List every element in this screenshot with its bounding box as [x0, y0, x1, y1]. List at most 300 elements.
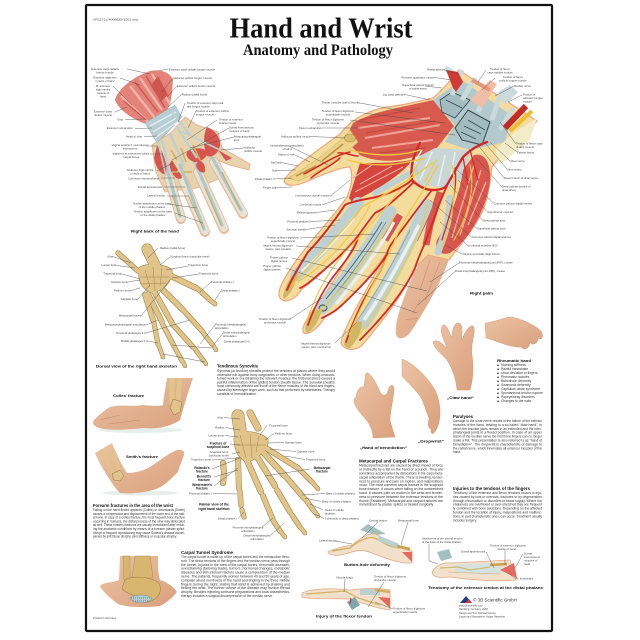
labels: palmar skeleton: articulation	[250, 537, 264, 541]
text block: injuries to the tendons: includes surgery.	[453, 518, 477, 522]
text block: injuries to the tendons: phalanxes are overflexed or over-stretched they are frequent	[453, 503, 542, 507]
wrist tendons and retinaculum	[433, 80, 512, 150]
labels: palmar skeleton: Tuberosity of distal phalanx	[325, 516, 360, 520]
logo: 3B Scientific	[460, 596, 517, 603]
labels: right palm: Tendon of flexor	[490, 67, 510, 71]
caption: dorsal skeleton: Dorsal view of the right hand skeleton	[96, 364, 177, 368]
interosseous muscles	[154, 127, 220, 179]
text block: forearm fractures: Forearm fractures in the area of the wrist	[93, 503, 174, 508]
illustration: hand of benediction	[354, 373, 395, 438]
labels: dorsal skeleton: Proximal phalanx I	[211, 280, 234, 284]
labels: tenotomy: M. lumbricalis	[516, 576, 534, 580]
text block: metacarpal and carpal fractures: or indirectly by a fall on the hand or a punch. They are	[359, 468, 443, 472]
illustration: claw hand	[433, 323, 474, 390]
labels: right palm: Lig. carpi palmare	[383, 92, 405, 96]
adductor muscle	[349, 160, 412, 202]
title: Hand and Wrist	[230, 12, 413, 44]
labels: back of the hand: Extensor digitorum	[93, 76, 117, 80]
labels: palmar skeleton: Base of middle phalanx	[326, 492, 356, 496]
labels: right palm: pollicis longus muscle	[499, 78, 527, 82]
labels: back of the hand: Tendon of extensor carpi radi-	[187, 101, 224, 105]
credits: www.3bscientific.com	[459, 604, 483, 608]
labels: palmar skeleton: Ulna	[217, 416, 223, 420]
labels: right palm: Distal interphalangeal joint (DIP), crease	[455, 269, 506, 273]
labels: dorsal skeleton: Middle phalanges II-V	[121, 339, 148, 343]
labels: right palm	[255, 67, 543, 349]
text block: paralyses: which the knuckle joints remain in an extended and the inter-	[453, 427, 542, 431]
illustration: injury of the flexor tendon	[302, 588, 390, 610]
labels: right palm: ulnaris muscle	[516, 145, 534, 149]
labels: right palm: profundus muscle	[317, 121, 339, 125]
text block: forearm fractures: Falling on the hand flexed upwards (Colles) or downwards (Smith)	[93, 508, 185, 512]
labels: dorsal skeleton: articulation	[223, 334, 237, 338]
labels: back of the hand: Adductor	[244, 146, 255, 150]
labels: right palm: Tendon of flexor digitorum	[312, 118, 345, 122]
caption: palmar skeleton	[198, 502, 230, 511]
labels: back of the hand: muscle of hand	[131, 172, 150, 176]
illustration: Smith's fracture	[95, 443, 184, 496]
labels: palmar skeleton: Fracture of	[210, 442, 227, 446]
labels: tenotomy	[422, 536, 540, 580]
labels: palmar skeleton: Radius	[215, 426, 225, 430]
labels: back of the hand: ulnaris muscle	[94, 113, 112, 117]
labels: back of the hand: muscle of	[97, 91, 109, 95]
labels: injury of the flexor tendon: Vincula longa	[336, 576, 353, 580]
illustration: tenotomy of the extensor tendon	[432, 549, 517, 581]
labels: right palm: Lumbrical muscles III/IV	[468, 244, 498, 248]
text block: forearm fractures: as well. These forearm fractures are usually immobilized after reduc-	[93, 523, 185, 527]
carpal bone joints	[140, 267, 170, 291]
caption: right back of the hand: Right back of the hand	[131, 230, 179, 234]
labels: dorsal skeleton: Distal phalanges II-V	[224, 340, 250, 344]
caption: drop hand: „Dropwrist“	[418, 440, 444, 444]
labels: right palm: Deep palmar arch	[483, 218, 506, 222]
thumb core	[288, 130, 358, 181]
labels: dorsal skeleton	[101, 246, 250, 362]
text block: injuries to the tendons: ly combined with bone avulsions. Depending on the affected	[453, 507, 542, 511]
text block: carpal tunnel syndrome: therapy includes a surgical decompression of the median nerve.	[181, 594, 273, 598]
labels: dorsal skeleton: Trapezoid bone	[199, 272, 219, 276]
labels: right palm: digital nerves	[271, 259, 288, 263]
text block: paralyses: the radial nerve, which innervates all extensor muscles of the	[453, 446, 542, 450]
illustration: rheumatoid hand	[485, 317, 542, 349]
labels: right palm: Hypothenar muscles	[488, 210, 514, 214]
labels: dorsal skeleton: Distal interphalangeal	[223, 330, 250, 334]
labels: right palm: Flexor retinaculum	[299, 126, 323, 130]
labels: dorsal skeleton: Distal phalanx I	[221, 288, 240, 292]
text block: tendinous synovitis: Synovial (or tendon) sheaths protect the tendons at places where they would	[217, 369, 335, 373]
labels: dorsal skeleton: Proximal interphalangeal	[215, 322, 246, 326]
caption: palmar skeleton: right hand skeleton	[198, 507, 230, 511]
text block: paralyses: muscles of the hand, leading to a so-called "claw hand", in	[453, 423, 542, 427]
labels: right palm: Proximal phalanx II	[287, 220, 311, 224]
text block: carpal tunnel syndrome: diseases and still unknown factors cause a compression of the median	[181, 571, 290, 575]
text block: carpal tunnel syndrome: rum. The flexor tendons of the fingers and the median nerve pass through	[181, 559, 290, 563]
panel: rheumatic hand list	[497, 358, 543, 403]
text block: tendinous synovitis: otherwise rub against bony outgrowths or other tendons. When doing unaccus-	[217, 373, 335, 377]
labels: palmar skeleton: fracture	[198, 478, 210, 482]
labels: right palm: Interphalangeal articulation	[270, 144, 304, 148]
labels: right palm: Median nerve	[514, 84, 531, 88]
caption: right palm: Right palm	[470, 292, 493, 296]
labels: right palm: Thenar muscles (ball of thumb)	[321, 100, 360, 104]
labels: injury of the flexor tendon: Tendon of flexor digitorum	[374, 574, 407, 578]
illustration: button-hole deformity	[328, 524, 412, 563]
text block: tendinous synovitis: most commonly affected are those of the flexor muscles of the hand and fingers,	[217, 384, 335, 388]
labels: right palm: Tendon of flexor	[503, 75, 523, 79]
text block: injuries to the tendons: Tenotomy of the extensor and flexor tendons occurs in inju-	[453, 491, 542, 495]
labels: tenotomy: muscle of hand	[497, 547, 516, 551]
labels: back of the hand: M. extensor	[96, 84, 110, 88]
text block: metacarpal and carpal fractures: ness to pressure between the extensor tendons of the	[359, 495, 443, 499]
labels: back of the hand: Dorsal aponeurosis	[138, 185, 163, 189]
panel: rheumatic hand list: Morning stiffness	[501, 363, 526, 367]
labels: right palm: Ulnar artery	[507, 168, 522, 172]
labels: palmar skeleton: scaphoid bone	[207, 445, 229, 449]
labels: palmar skeleton: Proximal interphalangeal	[233, 526, 264, 530]
labels: palmar skeleton: Lunate bone	[208, 434, 224, 438]
labels: back of the hand: alis longus muscle	[187, 104, 210, 108]
labels: tenotomy: at the base of the distal phalanx	[422, 540, 462, 544]
labels: palmar skeleton: Distal interphalangeal	[244, 534, 271, 538]
labels: back of the hand: Abductor pollicis longus muscle	[173, 76, 212, 80]
labels: tenotomy: Tendon of extensor digitorum	[490, 544, 527, 548]
labels: palmar skeleton: Winterstein's	[192, 483, 212, 487]
print code: VR1171L/4006625/1001 ofst	[93, 18, 138, 22]
caption: hand of benediction: „Hand of benediction“	[360, 446, 407, 450]
labels: palmar skeleton: Bennett's	[197, 474, 211, 478]
labels: right palm: Superficial palmar branch	[402, 83, 434, 87]
labels: right palm: Finger pulp	[263, 186, 277, 190]
text block: tendinous synovitis: painful inflammation of the gliding tendon sheath tissue. The synovial sheaths	[217, 380, 335, 384]
text block: metacarpal and carpal fractures: thumb (Tabatière). Metacarpal and carpal fractures are	[359, 499, 443, 503]
labels: right palm: manus, pars cruciformis	[301, 345, 331, 349]
labels: dorsal skeleton: Capitate bone	[121, 297, 138, 301]
finger tendon sheaths	[296, 203, 358, 276]
text block: metacarpal and carpal fractures: ness to pressure and pain on motion, and malpositions	[359, 479, 443, 483]
labels: palmar skeleton: Triquetral bone	[269, 424, 288, 428]
labels: right palm: Synovial sheath	[286, 228, 306, 232]
text block: paralyses: benediction". The dropwrist is characteristic of damage to	[453, 442, 542, 446]
labels: dorsal skeleton: Scaphoid bone (navicular bone)	[170, 254, 210, 258]
labels: right palm: Tendon of flexor digitorum	[267, 236, 300, 240]
text block: paralyses: Damage to the ulnar nerve results in the failure of the intrinsic	[453, 419, 542, 423]
labels: back of the hand: brevis muscle	[96, 70, 114, 74]
text block: tendinous synovitis: consists of immobilization.	[217, 392, 257, 396]
labels: right palm: Adductor pollicis muscle	[281, 134, 311, 138]
panel: rheumatic hand list: Spontaneous tendon rupture	[501, 391, 543, 395]
labels: back of the hand: Dorsal interosseous	[229, 126, 254, 130]
labels: back of the hand: Extensor carpi radialis longus muscle	[169, 68, 216, 72]
labels: palmar skeleton: Hamate bone	[285, 440, 302, 444]
labels: injury of the flexor tendon: profundus muscle	[374, 578, 397, 582]
panel: rheumatic hand list: Ulnar deviation of fingers	[501, 371, 538, 375]
labels: right palm: Deep palmar branch of	[502, 184, 531, 188]
text block: paralyses: lesion of the median nerve the first three fingers can no longer	[453, 435, 543, 439]
illustration: Colles' fracture	[93, 378, 193, 433]
labels: right palm: superficialis muscle	[271, 239, 296, 243]
labels: palmar skeleton	[189, 416, 360, 541]
text block: metacarpal and carpal fractures	[359, 458, 443, 507]
fingers	[169, 162, 243, 232]
labels: right palm: of hand	[282, 147, 292, 151]
labels: injury of the flexor tendon: superficialis muscle	[393, 610, 418, 614]
labels: back of the hand	[91, 67, 262, 223]
labels: right palm: Proper palmar	[270, 256, 288, 260]
labels: button-hole deformity: Lateral tendon	[319, 538, 337, 542]
labels: dorsal skeleton: Ulna	[107, 254, 113, 258]
labels: dorsal skeleton: Proximal phalanges II-V	[116, 331, 146, 335]
labels: right palm: ulnar artery	[502, 188, 517, 192]
text block: carpal tunnel syndrome: nerve. The patients, frequently women between 40 and 50 years of age,	[181, 574, 290, 578]
labels: back of the hand: extensorum	[123, 146, 138, 150]
labels: right palm: Radial artery	[427, 68, 444, 72]
text block: tendinous synovitis: tomed work or overstraining the relevant muscles, the frictional stress causes a	[217, 377, 335, 381]
labels: right palm: Pronator quadratus muscle	[401, 76, 435, 80]
labels: right palm: Ulnar nerve	[510, 159, 525, 163]
text block: paralyses: make a fist. This presentation is also referred to as "hand of	[453, 438, 542, 442]
labels: back of the hand: Tendon of extensor pollicis	[196, 109, 230, 113]
text block: forearm fractures: ing the anatomic conditions by means of a forearm plaster splint.	[93, 527, 185, 531]
labels: back of the hand: Tendon of extensor	[219, 118, 243, 122]
text block: tendinous synovitis: Tendinous Synovitis	[217, 364, 259, 368]
labels: back of the hand: Tendon attachment at the base	[134, 210, 173, 214]
retinaculum	[145, 105, 182, 143]
text block: forearm fractures: occurring in humans, the distal process of the ulna may dislocated	[93, 519, 185, 523]
labels: palmar skeleton: articulation	[241, 529, 255, 533]
labels: back of the hand: muscles of hand	[229, 129, 250, 133]
text block: metacarpal and carpal fractures: hand. It causes pain on motion in the wrist and tender-	[359, 491, 443, 495]
illustration: right back of the hand	[115, 70, 250, 232]
panel: rheumatic hand list: Changes to the nails	[501, 399, 531, 403]
text block: forearm fractures	[93, 503, 185, 539]
labels: right palm: profundus muscle	[264, 320, 286, 324]
text block: metacarpal and carpal fractures: carpal articulation of the thumb. There is swelling, tender-	[359, 475, 443, 479]
labels: back of the hand: Radius (radial bone)	[182, 92, 207, 96]
labels: right palm: Palmar fascia	[517, 150, 534, 154]
credits: Hamburg, Germany, 2008	[459, 608, 488, 611]
labels: back of the hand: Carpal bones	[123, 155, 140, 159]
caption: palmar skeleton: Palmar view of the	[199, 502, 229, 506]
labels: dorsal skeleton: Triquetral bone	[103, 272, 122, 276]
labels: right palm: muscle	[523, 100, 532, 104]
credits: Layout and Illustrations: Holger Vanselow	[459, 616, 505, 618]
labels: right palm: Superficial palmar arch	[477, 226, 506, 230]
labels: right palm: Common palmar digital arteries	[472, 235, 511, 239]
credits: Design and Text: Michael Feising	[459, 612, 496, 615]
labels: right palm: Nail bed	[271, 160, 281, 164]
text block: metacarpal and carpal fractures: Metacarpal fractures are caused by direct impact of force	[359, 464, 443, 468]
labels: palmar skeleton: Trapezoid bone	[306, 458, 326, 462]
labels: right palm: Tendon of	[523, 92, 536, 96]
labels: right palm: manus, pars anularis	[265, 247, 292, 251]
labels: back of the hand: Extensor carpi	[94, 110, 112, 114]
labels: tenotomy: muscles of	[524, 558, 538, 562]
text block: metacarpal and carpal fractures: sometimes accompanied by dislocations in the carpometa-	[359, 472, 443, 476]
printed note: Printed in Germany	[93, 616, 117, 620]
labels: right palm: carpi radialis muscle	[487, 70, 513, 74]
labels: back of the hand: Vagina tendinum musculorum	[112, 143, 149, 147]
labels: button-hole deformity: Metacarpal bone	[398, 518, 419, 522]
labels: back of the hand: Extensor carpi radialis	[91, 67, 119, 71]
caption: Smith's fracture: Smith's fracture	[126, 455, 158, 459]
illustration: drop hand	[402, 359, 440, 434]
labels: button-hole deformity	[319, 518, 419, 545]
labels: right palm: palmaris longus	[523, 96, 543, 100]
little finger marks	[405, 260, 440, 320]
poster frame	[86, 5, 552, 631]
labels: dorsal skeleton: Lunate bone	[101, 263, 117, 267]
text block: paralyses: Paralyses	[453, 414, 474, 419]
labels: back of the hand: joint	[233, 138, 239, 142]
text block: metacarpal and carpal fractures: bone fracture. It occurs when falling on the outstretched	[359, 487, 443, 491]
text block: carpal tunnel syndrome: overstraining (tailoring trade), tumors, hormonal changes, metabolic	[181, 567, 290, 571]
labels: tenotomy: interosseous	[524, 555, 540, 559]
text block: forearm fractures: causes a compression and displacement of the lower end of the radi-	[93, 512, 185, 516]
text block: paralyses: phalangeal joints in a flexed position. In case of an upper	[453, 431, 543, 435]
text block: metacarpal and carpal fractures: occur. The most common carpal fracture is the scaphoid	[359, 483, 443, 487]
labels: palmar skeleton: Proximal phalanx I	[189, 492, 212, 496]
text block: carpal tunnel syndrome: flexing the wrist. The further course of the disease may involve thenar	[181, 586, 291, 590]
labels: palmar skeleton: phalanx	[325, 512, 335, 516]
labels: back of the hand: Lateral tendon	[147, 194, 165, 198]
text block: injuries to the tendons: ries caused by cuts or overcuts, fractures or by degeneration	[453, 495, 542, 499]
panel: rheumatic hand list: Popeye/stray disorders	[501, 395, 535, 399]
text block: injuries to the tendons	[453, 486, 542, 522]
text block: carpal tunnel syndrome: Carpal Tunnel Syndrome	[181, 550, 234, 555]
arteries	[411, 142, 487, 190]
labels: dorsal skeleton: Metacarpal bones	[119, 314, 142, 318]
labels: back of the hand: Head of ulna	[126, 134, 142, 138]
illustration: palmar hand skeleton	[223, 413, 318, 537]
caption: tenotomy: Tenotomy of the extensor tendon at the distal phalanx	[428, 586, 543, 590]
labels: tenotomy: Dorsal aponeurosis	[461, 550, 486, 554]
text block: metacarpal and carpal fractures: Metacarpal and Carpal Fractures	[359, 458, 429, 464]
text block: carpal tunnel syndrome: atrophy. Besides injecting cortisone preparations and local anaesthetics,	[181, 590, 290, 594]
panel: rheumatic hand list: Rheumatic hand	[497, 358, 532, 363]
text block: carpal tunnel syndrome: The carpal tunnel is made up of the carpal bones and the retinaculum flexo-	[181, 555, 290, 559]
labels: back of the hand: Tendon attachment at the base	[133, 202, 172, 206]
labels: palmar skeleton: (navicular bone)	[209, 454, 229, 458]
labels: dorsal skeleton: Pisiform bone	[114, 288, 131, 292]
labels: back of the hand: Abductor digiti minimi	[127, 168, 154, 172]
labels: palmar skeleton: Scaphoid bone	[210, 450, 229, 454]
text block: carpal tunnel syndrome: the tunnel. Injuries in the area of the carpal bones, rheumatic diseases,	[181, 563, 290, 567]
labels: right palm: digital arteries	[263, 268, 281, 272]
labels: injury of the flexor tendon: Tendon of flexor digitorum	[393, 606, 426, 610]
credits	[459, 604, 505, 618]
labels: right palm: of radial artery	[409, 86, 428, 90]
panel: rheumatic hand list: Buttonhole deformity	[501, 379, 532, 383]
panel: rheumatic hand list: Painful handshake	[501, 367, 528, 371]
text block: tendinous synovitis: caused by stereotype finger work, such as that performed by secretaries. Therapy	[217, 388, 335, 392]
labels: dorsal skeleton: Radius (radial bone)	[160, 246, 185, 250]
labels: right palm: Tendon of flexor carpi	[516, 142, 543, 146]
text block: paralyses	[453, 414, 543, 454]
labels: back of the hand: Connexus intertendineus	[128, 176, 160, 180]
caption: injury of the flexor tendon: Injury of the flexor tendon	[316, 614, 372, 618]
labels: tenotomy: hand	[524, 562, 531, 566]
labels: right palm: Vagina fibrosa digitorum	[301, 342, 332, 346]
hand silhouette	[279, 70, 537, 349]
labels: back of the hand: of the middle phalanx	[139, 205, 166, 209]
labels: palmar skeleton: Body of middle phalanx	[322, 500, 352, 504]
labels: back of the hand: indicis muscle	[219, 121, 237, 125]
text block: forearm fractures: Abrupt or frequent repositioning may cause Sudeck's disease accom-	[93, 531, 185, 535]
text block: paralyses: hand.	[453, 450, 461, 454]
labels: right palm: Vagina synovialis digiti minimi	[463, 252, 500, 256]
labels: right palm: Nail	[272, 168, 277, 172]
labels: right palm: Distal phalanx I	[255, 177, 274, 181]
nerves	[292, 150, 432, 285]
illustration: carpal tunnel cross-section	[100, 556, 177, 607]
labels: right palm: Interosseous dorsal muscle I	[295, 194, 331, 198]
labels: right palm: Proper palmar	[263, 264, 281, 268]
carpal joints	[236, 434, 266, 458]
labels: back of the hand: Extensor retinaculum	[107, 126, 134, 130]
caption: Colles' fracture: Colles' fracture	[113, 394, 144, 398]
labels: injury of the flexor tendon	[336, 574, 426, 614]
labels: right palm: Vagina fibrosa digitorum	[263, 244, 294, 248]
labels: palmar skeleton: Metacarpal	[314, 466, 330, 470]
labels: right palm: Tendon of flexor digitorum	[322, 109, 355, 113]
labels: dorsal skeleton: Metacarpophalangeal articulation	[105, 322, 146, 326]
labels: back of the hand: longus muscle	[196, 112, 214, 116]
labels: right palm: Tendon of flexor digitorum	[259, 317, 292, 321]
labels: back of the hand: of the distal phalanx	[141, 213, 166, 217]
text block: injuries to the tendons: tendon and the location of injury, malpositions and malfunc-	[453, 510, 542, 514]
labels: palmar skeleton: Capitate bone	[297, 450, 315, 454]
little finger	[396, 254, 449, 338]
labels: tenotomy: Attachment of the central tendon	[422, 536, 463, 540]
text block: carpal tunnel syndrome	[181, 550, 291, 598]
caption: claw hand: „Claw hand“	[447, 396, 474, 400]
illustration: dorsal hand skeleton	[118, 249, 216, 366]
labels: right palm: Lumbrical muscle I	[300, 202, 323, 206]
labels: right palm: superficialis muscle	[326, 112, 351, 116]
illustration: right palm dissection	[279, 68, 537, 349]
palm tendon fan	[412, 148, 470, 188]
logo: 3B Scientific: © 3B Scientific GmbH	[473, 598, 517, 602]
labels: back of the hand: Ulna	[117, 118, 123, 122]
labels: back of the hand: muscle of hand	[96, 79, 115, 83]
text block: carpal tunnel syndrome: complain about numbness in the hand and tingling in the three middle	[181, 578, 290, 582]
subtitle: Anatomy and Pathology	[243, 42, 393, 59]
labels: back of the hand: pollicis muscle	[244, 149, 262, 153]
text block: forearm fractures: al bone. In case of a Colles fracture, the most frequent bone fracture	[93, 516, 185, 520]
labels: right palm: Deep branch of ulnar nerve	[504, 176, 538, 180]
labels: palmar skeleton: Pisiform bone	[275, 432, 293, 436]
text block: carpal tunnel syndrome: fingers during the night, stating that relief is achieved by shaking and	[181, 582, 290, 586]
finger tip pads	[283, 272, 298, 299]
labels: dorsal skeleton: Hamate bone	[111, 280, 128, 284]
labels: right palm: Matrix of nail	[278, 152, 294, 156]
text block: injuries to the tendons: Injuries to the tendons of the fingers	[453, 486, 531, 491]
caption: button-hole deformity: Button-hole deformity	[344, 563, 390, 567]
labels: back of the hand: Metacarpophalangeal	[234, 134, 261, 138]
labels: back of the hand: digitorum et extensoris indicis	[113, 152, 150, 156]
text block: forearm fractures: panied by soft tissue atrophy, joint stiffness or muscular atrophy.	[93, 535, 177, 539]
labels: palmar skeleton: Rolando's	[194, 466, 210, 470]
panel: rheumatic hand list: Swanneck deformity	[501, 383, 531, 387]
labels: back of the hand: Extensor pollicis brevis muscle	[177, 84, 216, 88]
hypothenar muscle	[436, 155, 490, 254]
labels: palmar skeleton: fracture	[196, 486, 208, 490]
labels: right palm: Palmar ligament	[297, 210, 317, 214]
labels: back of the hand: digiti minimi	[96, 88, 111, 92]
panel: rheumatic hand list: Capitulum ulnae syndrome	[501, 387, 540, 391]
thenar muscle	[345, 100, 454, 161]
